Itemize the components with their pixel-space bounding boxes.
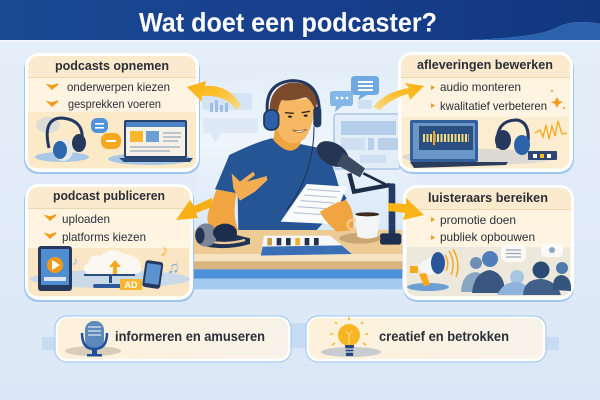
microphone <box>312 136 401 245</box>
illustration: laptop, headphones and waveform <box>402 117 569 168</box>
audio mixer <box>261 236 353 256</box>
illustration: tablet, cloud and phone: ♪ <box>160 241 168 260</box>
illustration: tablet, cloud and phone: ♫ <box>167 258 180 277</box>
icon: microphone <box>65 321 121 356</box>
panel: afleveringen bewerken <box>398 52 574 174</box>
list: uploaden <box>62 212 110 226</box>
panel: podcast publiceren <box>24 184 194 302</box>
list: promotie doen <box>440 213 516 227</box>
title: Wat doet een podcaster? <box>139 8 437 38</box>
coffee mug <box>339 212 381 244</box>
list: gesprekken voeren <box>68 97 161 111</box>
right hand <box>320 200 354 232</box>
headphones on desk <box>195 223 250 248</box>
script paper <box>281 184 347 224</box>
heading: afleveringen bewerken <box>417 57 553 72</box>
list: publiek opbouwen <box>440 230 535 244</box>
audience <box>461 251 571 295</box>
list <box>431 80 565 113</box>
icon: chat bubbles <box>330 76 379 112</box>
hair <box>270 83 318 117</box>
heading: luisteraars bereiken <box>428 190 548 205</box>
presenter torso <box>215 138 347 230</box>
presenter at desk <box>194 81 402 289</box>
face details <box>285 111 310 132</box>
heading: podcast publiceren <box>53 188 165 203</box>
neck <box>273 128 303 151</box>
panel: luisteraars bereiken <box>403 185 574 302</box>
hand raised <box>232 172 267 201</box>
arrow: to afleveringen bewerken <box>373 83 424 110</box>
central backdrop <box>196 76 416 270</box>
label: informeren en amuseren <box>115 329 265 344</box>
pill: informeren en amuseren <box>55 316 291 362</box>
list: platforms kiezen <box>62 230 146 244</box>
background screen <box>334 114 400 169</box>
headset <box>264 81 321 210</box>
illustration: megaphone and audience <box>407 243 571 296</box>
heading: podcasts opnemen <box>55 58 169 73</box>
list: onderwerpen kiezen <box>67 80 170 94</box>
illustration: headphones, chat and laptop <box>28 112 196 168</box>
list <box>46 212 146 244</box>
title banner <box>0 0 600 42</box>
decorative connector strips <box>42 337 56 350</box>
arrow: to luisteraars bereiken <box>388 198 424 220</box>
arrow: to podcast publiceren <box>176 198 212 220</box>
arrow: to podcasts opnemen <box>187 81 241 110</box>
illustration: tablet, cloud and phone: AD <box>124 280 138 290</box>
left arm <box>207 189 238 230</box>
illustration: tablet, cloud and phone: ♪ <box>72 254 78 268</box>
illustration: tablet, cloud and phone <box>28 241 190 296</box>
icon: light bulb <box>321 317 381 357</box>
desk <box>194 230 402 289</box>
list <box>431 213 535 244</box>
head <box>273 98 314 143</box>
label: creatief en betrokken <box>379 329 509 344</box>
panel: podcasts opnemen <box>24 53 200 174</box>
list: audio monteren <box>440 80 521 94</box>
pill: creatief en betrokken <box>306 316 546 362</box>
list: kwalitatief verbeteren <box>440 99 547 113</box>
list <box>48 80 170 111</box>
